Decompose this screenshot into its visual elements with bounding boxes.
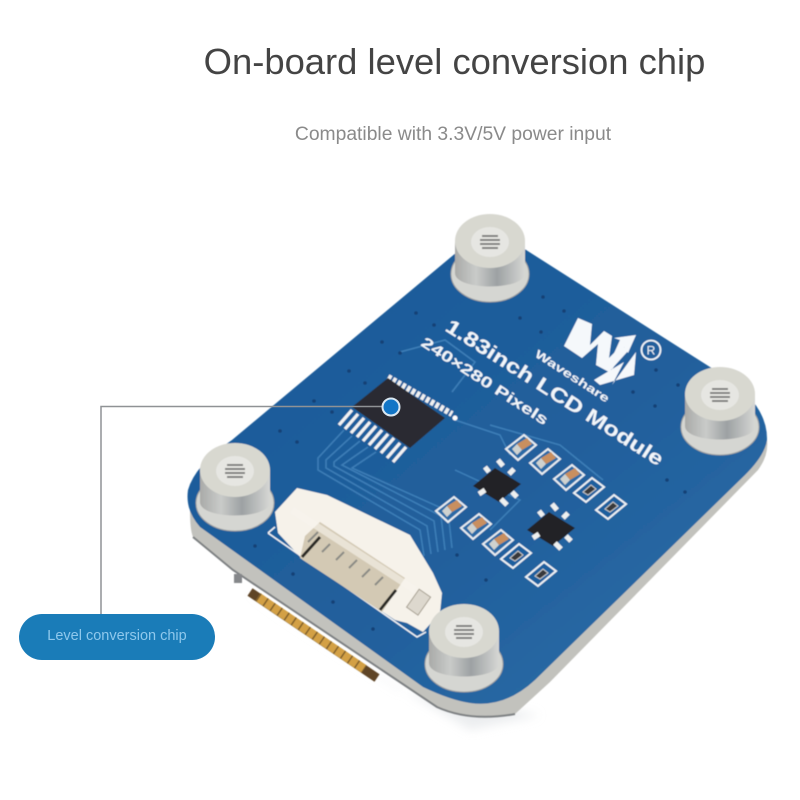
chip pins top bbox=[388, 377, 452, 414]
callout dot bbox=[382, 398, 400, 416]
registered mark bbox=[642, 340, 660, 360]
chip body bbox=[352, 378, 445, 448]
callout label: Level conversion chip bbox=[47, 628, 187, 644]
connector bbox=[275, 488, 442, 632]
silkscreen title: 1.83inch LCD Module bbox=[441, 316, 667, 471]
pin one marker bbox=[452, 416, 458, 420]
title: On-board level conversion chip bbox=[204, 41, 705, 82]
flexible cable bbox=[250, 592, 377, 678]
mounting posts bbox=[196, 214, 759, 692]
brand name: Waveshare bbox=[532, 348, 611, 405]
connector outline bbox=[268, 527, 426, 637]
PCB bbox=[188, 237, 767, 704]
clip bbox=[234, 574, 242, 583]
brand logo bbox=[564, 318, 636, 385]
drop shadow bbox=[240, 590, 540, 730]
subtitle: Compatible with 3.3V/5V power input bbox=[295, 124, 611, 145]
board edge bbox=[190, 440, 767, 717]
metal plate line bbox=[193, 537, 515, 717]
circuit traces bbox=[318, 340, 603, 556]
silkscreen resolution: 240×280 Pixels bbox=[418, 334, 551, 429]
surface components bbox=[436, 435, 626, 586]
chip pins bottom bbox=[339, 410, 406, 462]
registered mark: R bbox=[647, 344, 656, 358]
module bbox=[188, 214, 767, 717]
vias bbox=[253, 295, 687, 631]
callout label bbox=[19, 614, 215, 660]
callout leader line bbox=[101, 406, 390, 614]
